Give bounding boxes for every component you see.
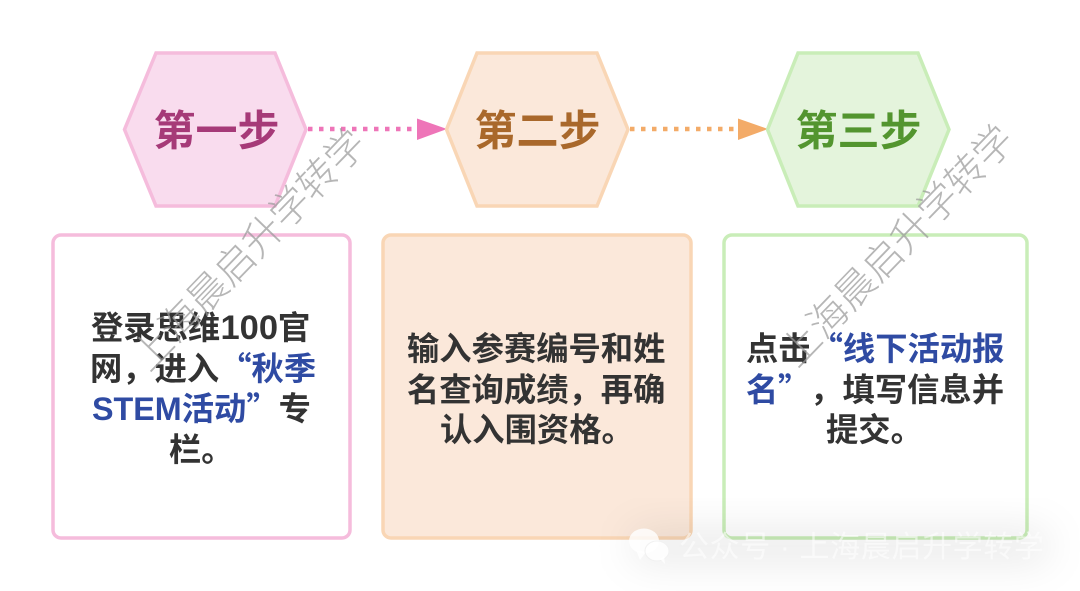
panel: step 1 description bbox=[53, 235, 350, 538]
step 2 text: 输入参赛编号和姓 bbox=[407, 331, 665, 367]
step 1 hexagon bbox=[124, 53, 306, 206]
watermark: left diagonal: 上海晨启升学转学 bbox=[124, 121, 375, 379]
step 2 heading: 第二步 bbox=[474, 108, 601, 154]
panel: step 3 description bbox=[724, 235, 1027, 538]
step 3 text: 名 bbox=[746, 372, 778, 408]
step 1 text: “秋季 bbox=[219, 344, 316, 390]
step 1 text: 官 bbox=[278, 310, 310, 346]
step 3 text: ， bbox=[810, 372, 842, 408]
step 3 text: 提交。 bbox=[826, 412, 923, 448]
footer watermark text: 公众号 · 上海晨启升学转学 bbox=[679, 531, 1044, 564]
step 3 heading: 第三步 bbox=[796, 108, 922, 154]
watermark: right diagonal: 上海晨启升学转学 bbox=[772, 117, 1023, 375]
step 3 hexagon bbox=[768, 53, 949, 206]
step 1 text: ”专 bbox=[246, 384, 311, 430]
step 2 text: 认入围资格。 bbox=[440, 412, 634, 448]
icon: wechat bbox=[629, 528, 669, 564]
panel: step 2 description bbox=[383, 235, 691, 538]
arrow: step 1 to step 2 bbox=[308, 118, 447, 140]
step 3 text: 填写信息并 bbox=[842, 372, 1004, 408]
step 3 text: “线下活动报 bbox=[811, 324, 1004, 370]
footer shadow bbox=[630, 530, 1050, 562]
step 1 text: STEM活动 bbox=[92, 391, 246, 427]
step 3 text: ” bbox=[778, 365, 810, 411]
arrow: step 2 to step 3 bbox=[630, 118, 768, 140]
step 1 text: 100 bbox=[220, 309, 278, 347]
step 1 text: 栏。 bbox=[169, 432, 234, 468]
step 2 text: 名查询成绩，再确 bbox=[407, 372, 665, 408]
step 2 hexagon bbox=[446, 53, 628, 206]
step 3 text: 点击 bbox=[746, 331, 811, 367]
step 1 text: 网，进入 bbox=[90, 351, 219, 387]
step 1 text: 登录思维 bbox=[91, 310, 220, 346]
step 1 heading: 第一步 bbox=[154, 108, 280, 154]
